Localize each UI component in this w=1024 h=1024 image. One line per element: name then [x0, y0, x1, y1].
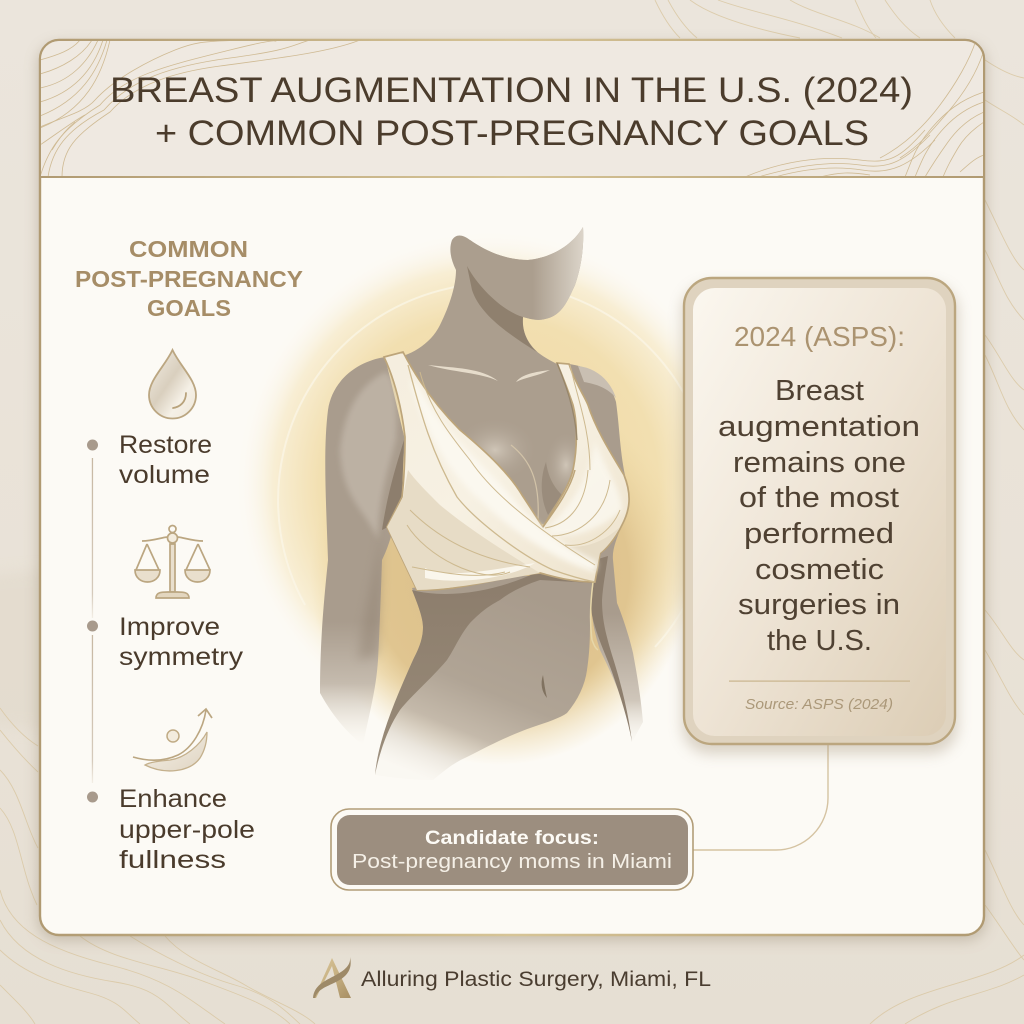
icon: water drop: [149, 350, 196, 418]
fold lines: [407, 363, 620, 582]
card body text: [718, 375, 920, 657]
band bright: [410, 380, 597, 572]
goal: restore volume: Restore: [119, 431, 212, 459]
neck shadow: [467, 266, 537, 352]
jaw highlight: [470, 227, 583, 320]
navel: [542, 675, 547, 698]
goal: enhance upper-pole fullness: fullness: [119, 846, 226, 874]
goal: enhance upper-pole fullness: [87, 785, 255, 874]
icon: upward lift arrow: [133, 709, 212, 771]
panel: 2024 ASPS stat card: [682, 278, 958, 754]
connector line: [693, 744, 828, 850]
illustration: torso figure: [320, 227, 643, 780]
card body text: surgeries in: [738, 589, 900, 621]
right arm inner dark strip: [591, 556, 632, 742]
card body text: remains one: [733, 447, 906, 479]
arm inner shadow: [382, 440, 404, 530]
callout: candidate focus: Post-pregnancy moms in Miami: [352, 851, 672, 873]
heading: common post-pregnancy goals: GOALS: [147, 295, 231, 321]
icon: balance scale: [135, 526, 210, 598]
footer: clinic name: Alluring Plastic Surgery, Miami, FL: [361, 967, 711, 991]
card body text: augmentation: [718, 411, 920, 443]
illustration: glowing halo: [235, 230, 745, 765]
card body text: cosmetic: [755, 554, 884, 586]
shaded lower panel: [387, 470, 540, 590]
card body text: performed: [744, 518, 894, 550]
panel: header band: [40, 40, 984, 178]
heading: common post-pregnancy goals: COMMON: [129, 236, 248, 262]
title: BREAST AUGMENTATION IN THE U.S. (2024): [110, 71, 913, 110]
callout: candidate focus: [331, 809, 693, 890]
timeline line: [92, 458, 93, 783]
goal: enhance upper-pole fullness: Enhance: [119, 785, 227, 813]
left arm: [320, 357, 405, 745]
goal: restore volume: [87, 431, 212, 489]
chest curves: [451, 416, 539, 484]
title: [110, 71, 913, 153]
right arm: [568, 364, 643, 742]
neck and chest: [388, 227, 590, 530]
waist shadow: [375, 572, 593, 775]
footer: logo mark: [313, 957, 351, 998]
goal: improve symmetry: Improve: [119, 613, 220, 641]
goal: improve symmetry: symmetry: [119, 643, 244, 671]
callout: candidate focus: Candidate focus:: [425, 828, 599, 849]
title: + COMMON POST-PREGNANCY GOALS: [155, 114, 869, 153]
card heading: 2024 (ASPS):: [734, 321, 905, 352]
collarbones: [428, 365, 498, 381]
source: Source: ASPS (2024): [745, 696, 893, 713]
arm lower soft shadow: [358, 530, 382, 660]
right waist gold edge: [591, 582, 598, 650]
heading: common post-pregnancy goals: [75, 236, 303, 321]
card body text: Breast: [775, 375, 864, 407]
goal: restore volume: volume: [119, 461, 210, 489]
illustration: draped top: [384, 352, 629, 590]
abdomen: [375, 575, 594, 780]
goal: enhance upper-pole fullness: upper-pole: [119, 816, 255, 844]
heading: common post-pregnancy goals: POST-PREGNANCY: [75, 266, 303, 292]
card body text: of the most: [739, 482, 899, 514]
goal: improve symmetry: [87, 613, 244, 671]
shaded right cup: [555, 527, 620, 572]
card body text: the U.S.: [767, 625, 872, 657]
